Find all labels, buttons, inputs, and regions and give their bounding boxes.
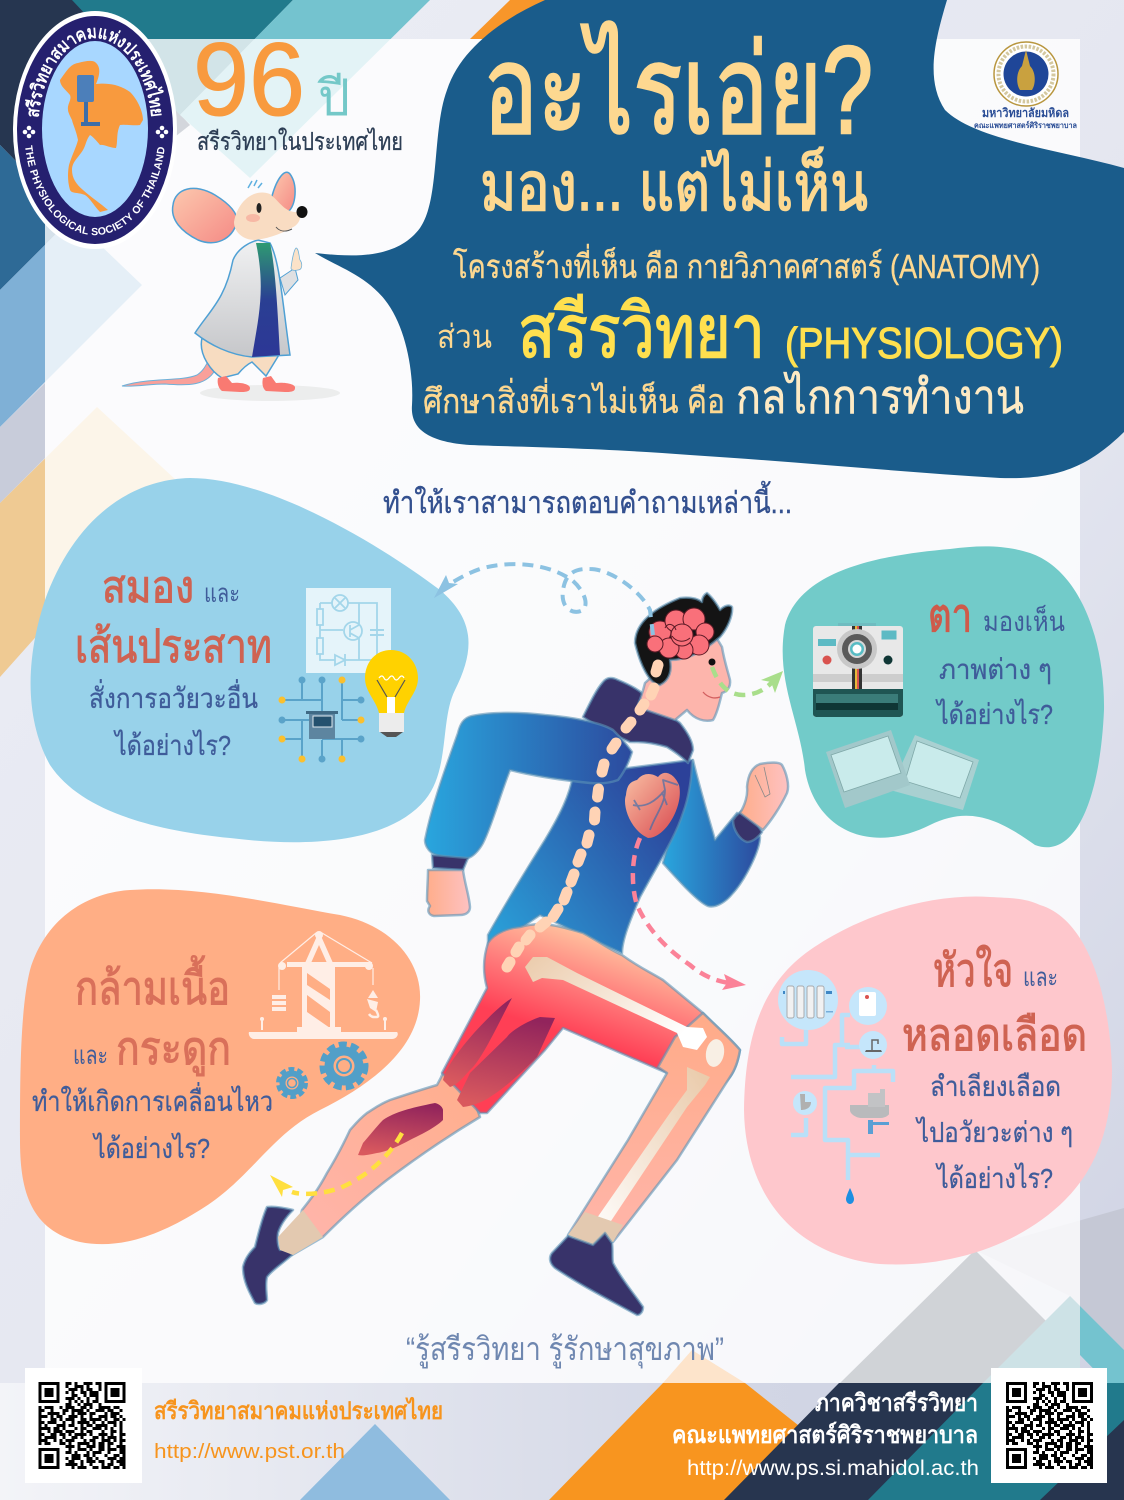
- intro question line: ทำให้เราสามารถตอบคำถามเหล่านี้...: [383, 481, 792, 520]
- footer right: department contact: [672, 1368, 1107, 1483]
- heart: [625, 773, 680, 838]
- panel: muscles and bones: กล้ามเนื้อ: [75, 955, 230, 1014]
- lower right panel triangles: [663, 1250, 1080, 1383]
- logo: physiological society of Thailand: [13, 11, 177, 249]
- back leg: [243, 1073, 480, 1304]
- front arm: [425, 713, 632, 916]
- physiology line: [437, 290, 1063, 373]
- muscles: [358, 998, 555, 1155]
- physiology line: (PHYSIOLOGY): [785, 319, 1063, 368]
- logo: physiological society of Thailand: สรีรวิทยาสมาคมแห่งประเทศไทย: [25, 28, 164, 117]
- panel: muscles and bones: ได้อย่างไร?: [92, 1133, 210, 1164]
- logo: physiological society of Thailand: THE PHYSIOLOGICAL SOCIETY OF THAILAND: [25, 145, 164, 236]
- panel: heart and blood vessels: ลำเลียงเลือด: [930, 1071, 1061, 1102]
- panel: muscles and bones: ทำให้เกิดการเคลื่อนไหว: [32, 1082, 273, 1117]
- arrow: eye to eye panel: [712, 667, 783, 695]
- footer right: department contact: คณะแพทยศาสตร์ศิริราชพยาบาล: [672, 1421, 978, 1449]
- QR code: department: [991, 1368, 1107, 1483]
- panel: heart and blood vessels: [744, 897, 1112, 1264]
- footer left: society contact: [25, 1368, 443, 1483]
- hood: [583, 678, 693, 763]
- mechanism line: ศึกษาสิ่งที่เราไม่เห็น คือ: [423, 378, 725, 421]
- icon: circuit diagram: [306, 588, 391, 673]
- 96 years heading: [193, 22, 403, 156]
- front sock and shoe: [550, 1212, 643, 1315]
- bones: [525, 957, 726, 1237]
- panel: brain and nerves: และ: [204, 578, 240, 608]
- panel: heart and blood vessels: หัวใจ: [933, 944, 1013, 996]
- icon: instant camera: [813, 623, 903, 717]
- QR code: society: [25, 1368, 142, 1483]
- panel: heart and blood vessels: และ: [1023, 962, 1058, 992]
- arrow: brain to nerves panel: [434, 564, 653, 635]
- icon: photographs: [826, 730, 979, 810]
- panel: eyes: ตา: [928, 589, 972, 641]
- title: อะไรเอ่ย?: อะไรเอ่ย?: [483, 22, 873, 160]
- brain: [647, 608, 714, 659]
- torso: [488, 760, 692, 953]
- logo: Mahidol University: มหาวิทยาลัยมหิดล: [982, 106, 1069, 120]
- 96 years heading: ปี: [317, 70, 350, 126]
- spine vertebrae: [507, 665, 658, 967]
- bottom band shapes: [0, 1383, 1124, 1500]
- footer right: department contact: ภาควิชาสรีรวิทยา: [815, 1390, 978, 1417]
- logo: Mahidol University: [974, 42, 1077, 130]
- header blob: dark blue: [315, 0, 1124, 478]
- logo: Mahidol University: คณะแพทยศาสตร์ศิริราชพยาบาล: [974, 120, 1077, 130]
- panel: eyes: ภาพต่าง ๆ: [939, 654, 1052, 685]
- 96 years heading: สรีรวิทยาในประเทศไทย: [197, 127, 403, 156]
- arrow: heart to vessels panel: [633, 838, 746, 990]
- runner figure: [243, 593, 788, 1315]
- panel: eyes: มองเห็น: [983, 604, 1065, 637]
- icon: crane: [249, 931, 398, 1039]
- arrow: muscle to muscle panel: [270, 1133, 402, 1197]
- panel: brain and nerves: ได้อย่างไร?: [113, 730, 231, 761]
- panel: eyes: ได้อย่างไร?: [935, 699, 1053, 730]
- panel: muscles and bones: กระดูก: [116, 1022, 231, 1076]
- panel: brain and nerves: สมอง: [102, 563, 194, 612]
- footer left: society contact: http://www.pst.or.th: [154, 1441, 345, 1463]
- mouse mascot: [122, 172, 340, 401]
- panel: eyes: [783, 546, 1104, 847]
- panel: brain and nerves: เส้นประสาท: [75, 620, 272, 672]
- subtitle: มอง แต่ไม่เห็น: มอง... แต่ไม่เห็น: [480, 147, 868, 225]
- physiology line: สรีรวิทยา: [518, 290, 765, 373]
- footer right: department contact: http://www.ps.si.mahidol.ac.th: [687, 1457, 979, 1480]
- slogan quote: “รู้สรีรวิทยา รู้รักษาสุขภาพ”: [406, 1331, 724, 1369]
- icon: gears: [280, 1047, 363, 1095]
- icon: light bulb: [365, 650, 418, 737]
- panel: heart and blood vessels: ได้อย่างไร?: [935, 1163, 1053, 1194]
- back arm: [663, 760, 788, 906]
- panel: brain and nerves: สั่งการอวัยวะอื่น: [89, 679, 258, 714]
- head and neck: [635, 593, 732, 721]
- footer left: society contact: สรีรวิทยาสมาคมแห่งประเทศไทย: [154, 1396, 443, 1425]
- panel: muscles and bones: และ: [73, 1040, 108, 1070]
- 96 years heading: 96: [193, 22, 305, 138]
- panel: heart and blood vessels: ไปอวัยวะต่าง ๆ: [915, 1117, 1073, 1148]
- panel: muscles and bones: [20, 889, 420, 1244]
- icon: plumbing: [778, 970, 893, 1204]
- physiology line: ส่วน: [437, 318, 492, 355]
- icon: circuit chip: [278, 676, 364, 762]
- panel: brain and nerves: [31, 478, 469, 842]
- hip and thigh: [442, 924, 740, 1242]
- mechanism line: [423, 370, 1024, 423]
- mechanism line: กลไกการทำงาน: [736, 370, 1024, 423]
- panel: heart and blood vessels: หลอดเลือด: [902, 1011, 1087, 1060]
